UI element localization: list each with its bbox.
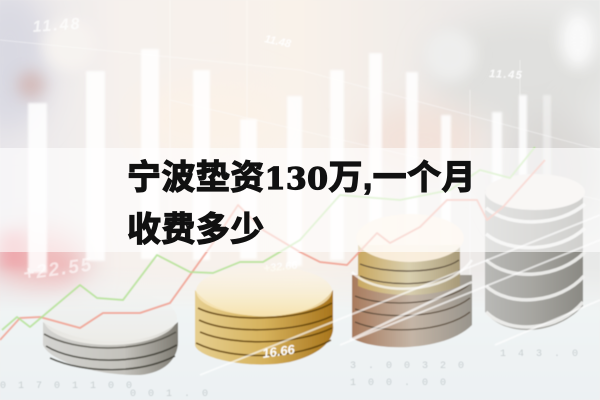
chart grid lines (0, 0, 600, 300)
chart numbers: 11.45 (489, 68, 524, 82)
chart numbers: +22.55 (22, 254, 95, 285)
printed table figures (0, 349, 581, 400)
coin stack: grey (485, 174, 585, 330)
chart numbers (22, 16, 524, 285)
line chart: red and green trends (0, 147, 545, 340)
chart numbers: +32.66 (263, 259, 299, 275)
printed table figures: 3 . 0 0 3 2 0 (350, 361, 467, 372)
chart numbers: 11.48 (263, 33, 293, 51)
diagonal light streaks (200, 215, 600, 375)
coin stack: gold (195, 266, 333, 365)
printed table figures: 1 0 0 . 0 0 (350, 378, 449, 389)
coin value label: 16.66 (261, 341, 296, 361)
coin stack: mixed (350, 214, 472, 347)
chart numbers: 11.48 (32, 16, 82, 36)
title band (0, 148, 600, 252)
printed table figures: 0 0 1 . 0 (130, 389, 211, 400)
title: 宁波垫资130万,一个月收费多少 (127, 159, 476, 249)
white bar chart (28, 49, 551, 325)
printed table figures: 0 1 7 0 1 1 0 0 (0, 381, 135, 392)
printed table figures: 1 4 3 . 0 (500, 349, 581, 360)
coin stack: silver (43, 291, 178, 375)
